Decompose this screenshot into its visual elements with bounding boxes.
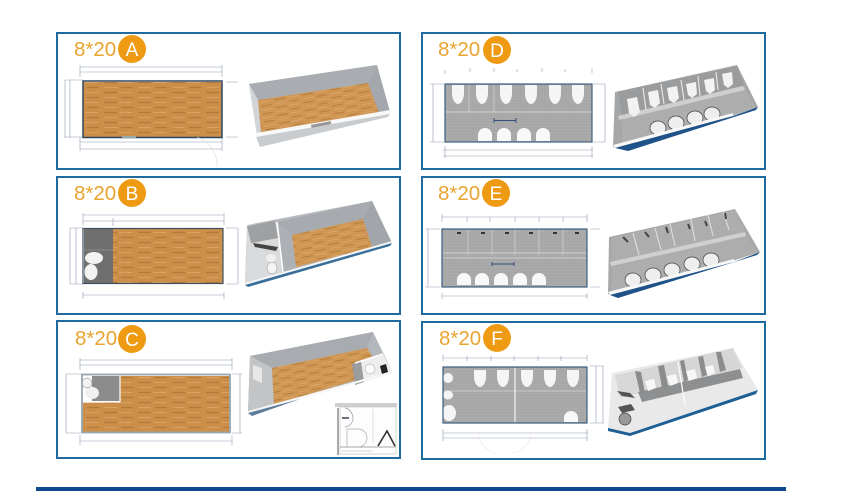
3D view F (608, 348, 758, 436)
heading: 8*20 E: E (490, 184, 502, 205)
3D view C (248, 332, 393, 416)
floor plan F (442, 355, 604, 453)
heading: 8*20 D: D (490, 41, 504, 62)
heading: 8*20 E: 8*20 (438, 182, 480, 205)
heading: 8*20 D: 8*20 (438, 38, 480, 61)
3D view E (608, 209, 760, 298)
3D view A (249, 65, 390, 147)
heading: 8*20 B: 8*20 (74, 182, 116, 205)
heading: 8*20 C: 8*20 (75, 327, 117, 350)
panel: 8*20 D (422, 33, 765, 169)
3D view D (613, 65, 758, 151)
heading: 8*20 A: A (126, 40, 139, 61)
heading: 8*20 E (438, 179, 510, 207)
heading: 8*20 B: B (126, 184, 138, 205)
heading: 8*20 C (75, 325, 146, 353)
panel: 8*20 A (57, 33, 400, 169)
heading: 8*20 A (74, 35, 146, 63)
heading: 8*20 F (439, 324, 511, 352)
panel: 8*20 C (57, 321, 400, 458)
heading: 8*20 D (438, 36, 511, 64)
floor plan A (65, 65, 238, 167)
inset: bathroom drawing (335, 403, 397, 457)
floor plan B (70, 213, 238, 299)
floor plan D (430, 68, 605, 158)
3D view B (245, 201, 392, 287)
heading: 8*20 A: 8*20 (74, 38, 116, 61)
floor plan E (425, 214, 600, 299)
heading: 8*20 F: F (491, 329, 503, 350)
heading: 8*20 B (74, 179, 146, 207)
heading: 8*20 C: C (125, 330, 139, 351)
panel: 8*20 F (422, 322, 765, 459)
heading: 8*20 F: 8*20 (439, 327, 481, 350)
panel: 8*20 E (422, 177, 765, 314)
panel: 8*20 B (57, 177, 400, 314)
bottom bar (36, 487, 786, 491)
floor plan C (66, 358, 242, 445)
